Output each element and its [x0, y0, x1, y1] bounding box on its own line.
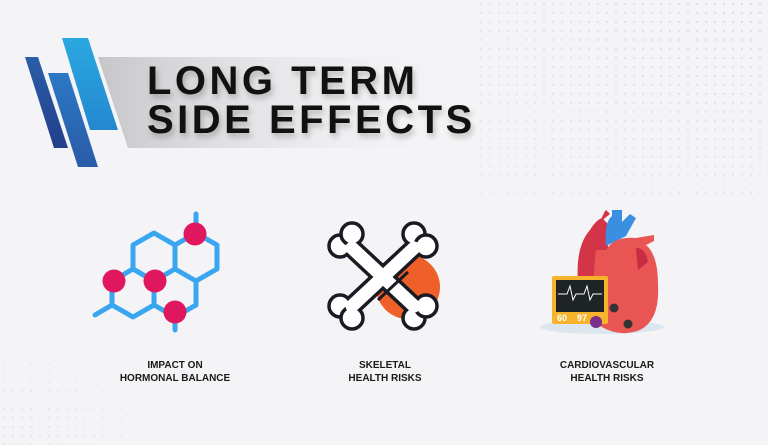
- label: skeletal: HEALTH RISKS: [348, 373, 422, 384]
- label: cardiovascular: [560, 360, 654, 384]
- label: hormonal: IMPACT ON: [147, 360, 203, 371]
- label: hormonal: [120, 360, 230, 384]
- title banner: [25, 38, 314, 167]
- title: LONG TERM: [147, 59, 418, 103]
- title: [147, 59, 476, 142]
- label: cardiovascular: HEALTH RISKS: [570, 373, 644, 384]
- label: skeletal: [348, 360, 422, 384]
- label: skeletal: SKELETAL: [359, 360, 411, 371]
- label: cardiovascular: CARDIOVASCULAR: [560, 360, 654, 371]
- icon: heart with monitor: 97: [577, 313, 587, 323]
- title: SIDE EFFECTS: [147, 98, 476, 142]
- label: hormonal: HORMONAL BALANCE: [120, 373, 230, 384]
- logo stripes: [25, 38, 118, 167]
- icon: heart with monitor: 60: [557, 313, 567, 323]
